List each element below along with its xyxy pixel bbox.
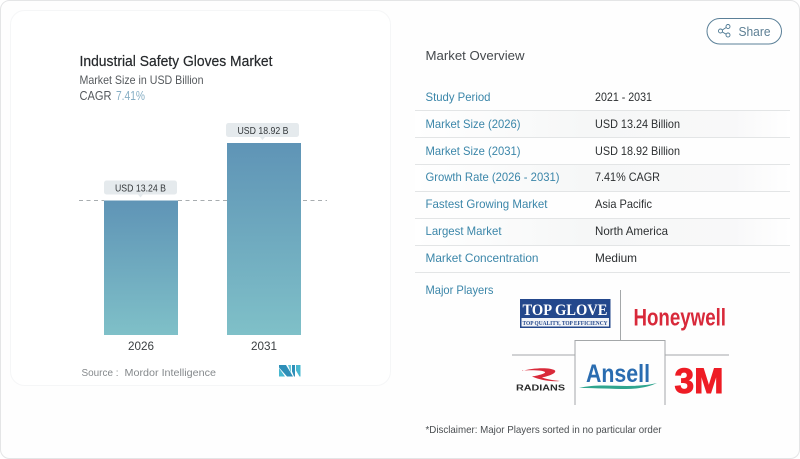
row: fastest growing market: Asia Pacific (595, 197, 652, 211)
row: market concentration: Medium (595, 251, 637, 265)
logo: Top Glove (520, 299, 610, 328)
value label: 2026 (104, 180, 177, 198)
value label: 2031: USD 18.92 B (238, 126, 289, 137)
row: fastest growing market (426, 197, 652, 211)
logo: Honeywell: Honeywell (634, 304, 726, 332)
row: study period: Study Period (426, 90, 490, 104)
row: market size 2026: USD 13.24 Billion (595, 117, 680, 131)
row: growth rate: Growth Rate (2026 - 2031) (426, 170, 560, 184)
logo: Radians (516, 368, 566, 392)
bar: 2031 (227, 143, 301, 335)
row: largest market: Largest Market (426, 224, 502, 238)
share button: Share (738, 24, 770, 39)
value label: 2031 (226, 123, 299, 140)
row: market size 2031 (426, 144, 680, 158)
logo: Top Glove: TOP QUALITY, TOP EFFICIENCY (522, 321, 608, 327)
row: growth rate (426, 170, 660, 184)
logo: Top Glove: TOP GLOVE (522, 302, 608, 319)
heading: market overview: Market Overview (426, 48, 525, 63)
row: market size 2026 (426, 117, 680, 131)
axis label: 2026: 2026 (128, 339, 154, 353)
panel: chart card (10, 10, 390, 386)
row: market size 2031: USD 18.92 Billion (595, 144, 680, 158)
row: largest market: North America (595, 224, 668, 238)
row: market size 2026: Market Size (2026) (426, 117, 521, 131)
logo: 3M: 3M (674, 362, 724, 401)
row: market concentration: Market Concentration (426, 251, 538, 265)
value label: 2026: USD 13.24 B (115, 184, 166, 194)
source note: Source : (82, 367, 118, 379)
source note (82, 367, 216, 379)
chart title: Industrial Safety Gloves Market (80, 54, 272, 70)
row: largest market (426, 224, 668, 238)
row: growth rate: 7.41% CAGR (595, 170, 660, 184)
CAGR label: CAGR (80, 89, 112, 103)
chart subtitle: Market Size in USD Billion (80, 73, 204, 87)
panel: market overview table (415, 90, 790, 272)
share button (707, 18, 782, 44)
icon: Mordor Intelligence logo (279, 365, 300, 376)
row: market size 2031: Market Size (2031) (426, 144, 521, 158)
icon: share (718, 24, 730, 37)
row: study period: 2021 - 2031 (595, 90, 652, 104)
heading: major players: Major Players (426, 283, 494, 297)
row: study period (426, 90, 652, 104)
logo: Ansell: Ansell (586, 360, 650, 388)
row: market concentration (426, 251, 637, 265)
source note: Mordor Intelligence (124, 367, 216, 379)
axis label: 2031: 2031 (251, 339, 277, 353)
bar chart (79, 123, 327, 353)
bar: 2026 (104, 200, 178, 335)
CAGR label (80, 89, 145, 103)
disclaimer: *Disclaimer: Major Players sorted in no particular order (426, 424, 662, 436)
logo: Radians: RADIANS (516, 384, 566, 392)
row: fastest growing market: Fastest Growing Market (426, 197, 548, 211)
CAGR label: 7.41% (116, 89, 145, 103)
panel: major players logos (512, 290, 729, 405)
